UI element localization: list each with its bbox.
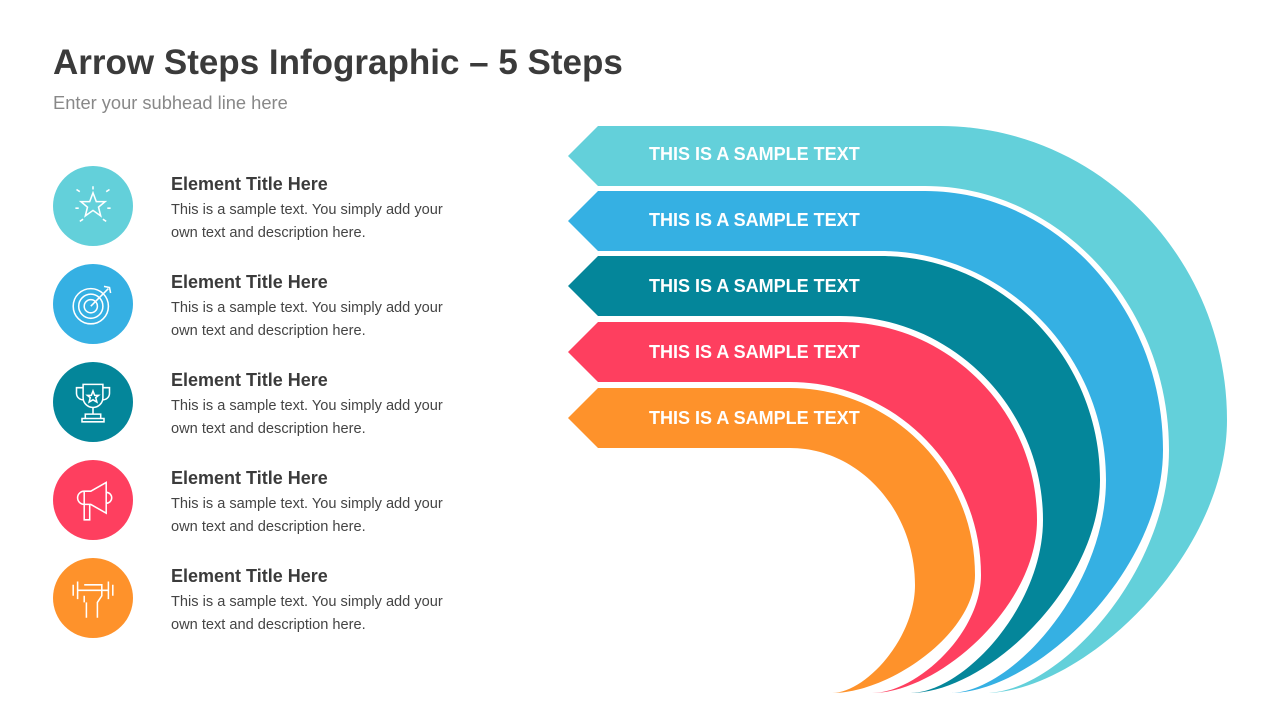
icon: trophy (53, 362, 133, 442)
arrow 5: THIS IS A SAMPLE TEXT (649, 408, 860, 428)
item 3 (53, 362, 443, 442)
item 5 (53, 558, 443, 638)
item 3: Element Title Here (171, 370, 328, 390)
icon: fist with dumbbell (53, 558, 133, 638)
arrow 3 (568, 256, 1100, 693)
item 2: This is a sample text. You simply add your own text and description here. (171, 300, 443, 339)
arrow 4 (568, 322, 1037, 693)
item 5: This is a sample text. You simply add your own text and description here. (171, 594, 443, 633)
arrow 1: THIS IS A SAMPLE TEXT (649, 144, 860, 164)
arrow 3: THIS IS A SAMPLE TEXT (649, 276, 860, 296)
item 2: Element Title Here (171, 272, 328, 292)
arrow 5 (568, 388, 975, 693)
item 1: Element Title Here (171, 174, 328, 194)
item 3: This is a sample text. You simply add your own text and description here. (171, 398, 443, 437)
arrow 4: THIS IS A SAMPLE TEXT (649, 342, 860, 362)
title: Arrow Steps Infographic – 5 Steps (53, 43, 623, 82)
item 1 (53, 166, 443, 246)
item 5: Element Title Here (171, 566, 328, 586)
item 4 (53, 460, 443, 540)
subhead: Enter your subhead line here (53, 92, 288, 113)
item 1: This is a sample text. You simply add your own text and description here. (171, 202, 443, 241)
item 4: Element Title Here (171, 468, 328, 488)
icon: megaphone (53, 460, 133, 540)
icon: target (53, 264, 133, 344)
arrow 2: THIS IS A SAMPLE TEXT (649, 210, 860, 230)
icon: star (53, 166, 133, 246)
item 4: This is a sample text. You simply add your own text and description here. (171, 496, 443, 535)
item 2 (53, 264, 443, 344)
